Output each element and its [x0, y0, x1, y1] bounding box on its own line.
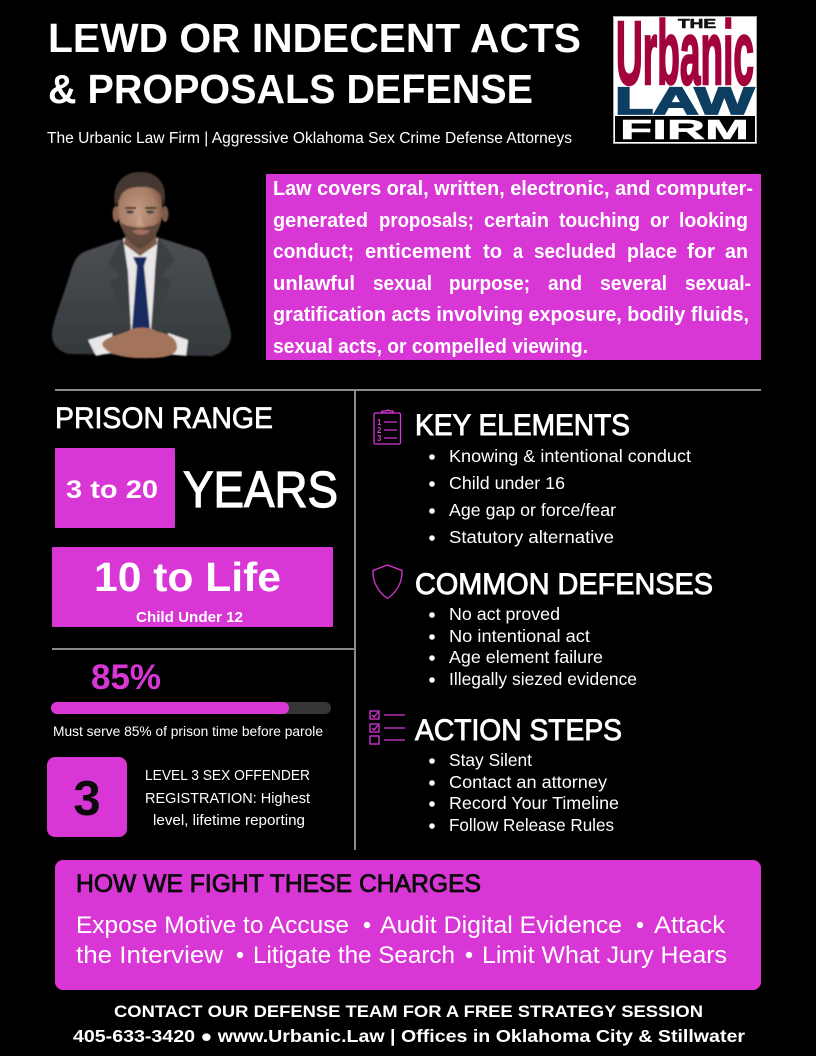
parole note: Must serve 85% of prison time before parole — [53, 723, 323, 739]
registration text — [145, 768, 310, 829]
panel: law summary callout: and — [548, 273, 582, 295]
stat: 85 percent: 85% — [91, 658, 161, 697]
section: key elements: Age gap or force/fear — [449, 500, 616, 520]
callout: 10 to life, child under 12: 10 to Life — [94, 554, 281, 600]
panel: how we fight these charges — [55, 860, 761, 990]
panel: how we fight these charges: Audit Digital Evidence — [380, 912, 622, 939]
title — [48, 15, 581, 112]
panel: how we fight these charges: the Interview — [76, 942, 224, 969]
panel: law summary callout: conduct; — [273, 241, 354, 263]
section: common defenses: No intentional act — [449, 626, 590, 646]
panel: law summary callout: Law covers oral, written, electronic, and computer- — [273, 178, 753, 200]
section: common defenses: Illegally siezed evidence — [449, 669, 637, 689]
callout: 10 to life, child under 12: Child Under 12 — [136, 609, 243, 626]
section: common defenses: No act proved — [449, 604, 560, 624]
section: action steps: Stay Silent — [449, 750, 532, 770]
prison range: 3 to 20 years — [55, 448, 338, 528]
panel: law summary callout: certain — [484, 210, 549, 232]
section: key elements: KEY ELEMENTS — [415, 409, 630, 442]
panel: law summary callout: secluded — [534, 241, 616, 263]
panel: law summary callout: place — [627, 241, 677, 263]
subtitle: The Urbanic Law Firm | Aggressive Oklahoma Sex Crime Defense Attorneys — [47, 130, 572, 147]
panel: law summary callout: sexual acts, or compelled viewing. — [273, 336, 588, 358]
panel: law summary callout: several — [600, 273, 667, 295]
logo: The Urbanic Law Firm: LAW — [615, 81, 754, 123]
logo: The Urbanic Law Firm: THE — [678, 17, 716, 31]
panel: law summary callout: proposals; — [379, 210, 474, 232]
footer contact: 405-633-3420 ● www.Urbanic.Law | Offices in Oklahoma City & Stillwater — [73, 1026, 745, 1046]
registration text: level, lifetime reporting — [153, 813, 305, 829]
panel: law summary callout: gratification acts involving exposure, bodily fluids, — [273, 304, 749, 326]
section: action steps: Contact an attorney — [449, 772, 607, 792]
logo: The Urbanic Law Firm — [613, 4, 757, 145]
icon: clipboard checklist: 3 — [377, 434, 382, 443]
panel: how we fight these charges: Attack — [654, 912, 726, 939]
logo: The Urbanic Law Firm: FIRM — [620, 114, 749, 145]
panel: law summary callout — [266, 174, 761, 360]
icon: shield — [373, 565, 402, 598]
section: key elements: Statutory alternative — [449, 527, 614, 547]
prison range: 3 to 20 years: YEARS — [183, 461, 338, 518]
panel: law summary callout: to — [483, 241, 502, 263]
panel: law summary callout: an — [725, 241, 748, 263]
panel: law summary callout: enticement — [365, 241, 471, 263]
registration text: REGISTRATION: Highest — [145, 791, 310, 807]
heading: prison range: PRISON RANGE — [55, 402, 273, 435]
icon: clipboard checklist: 2 — [377, 426, 382, 435]
title: LEWD OR INDECENT ACTS — [48, 15, 581, 61]
section: key elements — [415, 409, 691, 547]
attorney portrait — [52, 172, 231, 358]
prison range: 3 to 20 years: 3 to 20 — [66, 476, 158, 504]
panel: law summary callout: sexual- — [685, 273, 751, 295]
section: action steps — [415, 714, 622, 835]
title: & PROPOSALS DEFENSE — [48, 66, 533, 112]
section: action steps: ACTION STEPS — [415, 714, 622, 747]
panel: how we fight these charges: Limit What Jury Hears — [482, 942, 727, 969]
registration text: LEVEL 3 SEX OFFENDER — [145, 768, 310, 784]
footer contact: CONTACT OUR DEFENSE TEAM FOR A FREE STRATEGY SESSION — [114, 1002, 703, 1021]
panel: law summary callout: unlawful — [273, 273, 355, 295]
panel: law summary callout: or — [650, 210, 669, 232]
level 3 badge: 3 — [73, 772, 101, 826]
section: common defenses — [415, 568, 713, 689]
section: common defenses: COMMON DEFENSES — [415, 568, 713, 601]
footer contact — [73, 1002, 745, 1046]
icon: clipboard checklist — [374, 410, 400, 444]
icon: checklist — [370, 711, 405, 744]
panel: law summary callout: for — [687, 241, 715, 263]
panel: law summary callout: touching — [559, 210, 640, 232]
panel: law summary callout: purpose; — [449, 273, 530, 295]
panel: law summary callout: a — [513, 241, 524, 263]
section: key elements: Knowing & intentional conduct — [449, 446, 691, 466]
section: key elements: Child under 16 — [449, 473, 565, 493]
panel: how we fight these charges: Litigate the Search — [253, 942, 455, 969]
panel: law summary callout: generated — [273, 210, 368, 232]
section: action steps: Follow Release Rules — [449, 815, 614, 835]
section: common defenses: Age element failure — [449, 647, 603, 667]
level 3 badge — [47, 757, 127, 837]
callout: 10 to life, child under 12 — [52, 547, 333, 627]
progress bar: 85 percent — [51, 702, 331, 714]
icon: clipboard checklist: 1 — [377, 418, 382, 427]
panel: law summary callout: sexual — [373, 273, 432, 295]
section: action steps: Record Your Timeline — [449, 793, 619, 813]
panel: law summary callout: looking — [679, 210, 748, 232]
panel: how we fight these charges: HOW WE FIGHT THESE CHARGES — [76, 870, 481, 898]
panel: how we fight these charges: Expose Motive to Accuse — [76, 912, 349, 939]
